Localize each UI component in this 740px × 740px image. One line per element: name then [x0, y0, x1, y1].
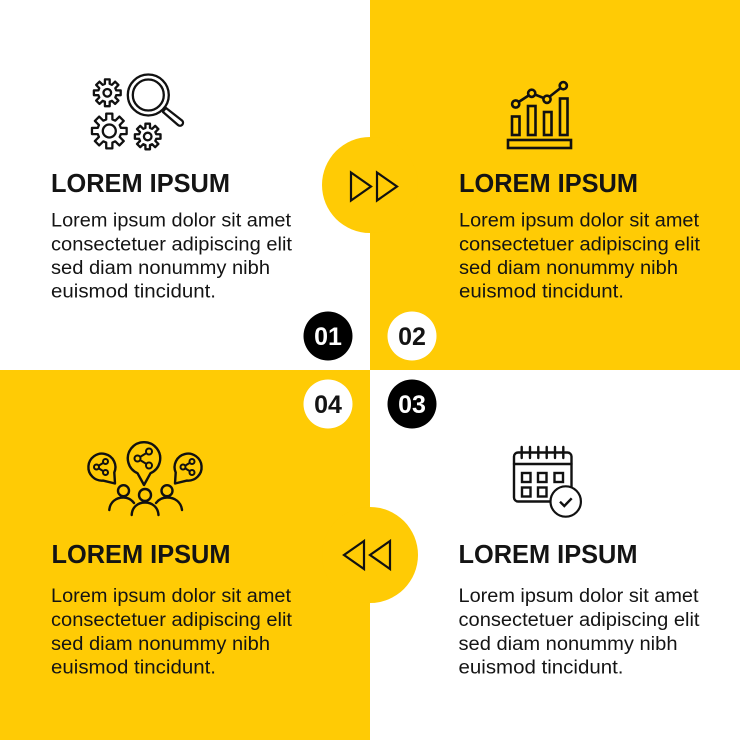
panel: step 4 background — [0, 370, 370, 740]
icon: bar chart with trend line — [508, 82, 571, 148]
icon: calendar with check — [514, 447, 581, 517]
text block: step 1: LOREM IPSUM — [51, 170, 230, 198]
text block: step 4: consectetuer adipiscing elit — [51, 610, 293, 631]
badge: 04: 04 — [314, 391, 342, 419]
text block: step 4: euismod tincidunt. — [51, 658, 216, 678]
text block: step 1: sed diam nonummy nibh — [51, 258, 270, 279]
text block: step 1: consectetuer adipiscing elit — [51, 234, 293, 256]
text block: step 4: sed diam nonummy nibh — [51, 634, 270, 655]
text block: step 4: Lorem ipsum dolor sit amet — [51, 586, 292, 607]
connector tab: step 3 to 4 — [322, 507, 418, 603]
text block: step 1 — [51, 170, 293, 302]
text block: step 4 — [51, 541, 293, 678]
text block: step 2 — [459, 170, 701, 302]
badge: 04 — [304, 380, 352, 428]
text block: step 2: consectetuer adipiscing elit — [459, 234, 701, 256]
text block: step 3: sed diam nonummy nibh — [458, 634, 678, 655]
text block: step 3 — [458, 541, 700, 678]
arrow: rewind — [344, 541, 390, 569]
text block: step 2: LOREM IPSUM — [459, 170, 638, 198]
panel: step 1 background — [0, 0, 370, 370]
badge: 01: 01 — [314, 323, 342, 351]
badge: 03: 03 — [398, 391, 426, 419]
text block: step 3: euismod tincidunt. — [458, 658, 624, 678]
icon: people sharing speech bubbles — [88, 442, 202, 515]
badge: 02: 02 — [398, 323, 426, 351]
panel: step 2 background — [370, 0, 740, 370]
text block: step 3: Lorem ipsum dolor sit amet — [458, 586, 699, 607]
text block: step 2: euismod tincidunt. — [459, 282, 624, 302]
text block: step 1: euismod tincidunt. — [51, 282, 216, 302]
text block: step 1: Lorem ipsum dolor sit amet — [51, 210, 292, 232]
text block: step 2: Lorem ipsum dolor sit amet — [459, 210, 700, 232]
badge: 03 — [388, 380, 436, 428]
arrow: fast forward — [351, 172, 397, 200]
panel: step 3 background — [370, 370, 740, 740]
text block: step 3: consectetuer adipiscing elit — [458, 610, 700, 631]
connector tab: step 1 to 2 — [322, 137, 418, 233]
text block: step 4: LOREM IPSUM — [52, 541, 230, 569]
badge: 01 — [304, 312, 352, 360]
icon: gears and magnifier — [92, 74, 183, 149]
text block: step 2: sed diam nonummy nibh — [459, 258, 678, 279]
badge: 02 — [388, 312, 436, 360]
text block: step 3: LOREM IPSUM — [458, 541, 638, 569]
